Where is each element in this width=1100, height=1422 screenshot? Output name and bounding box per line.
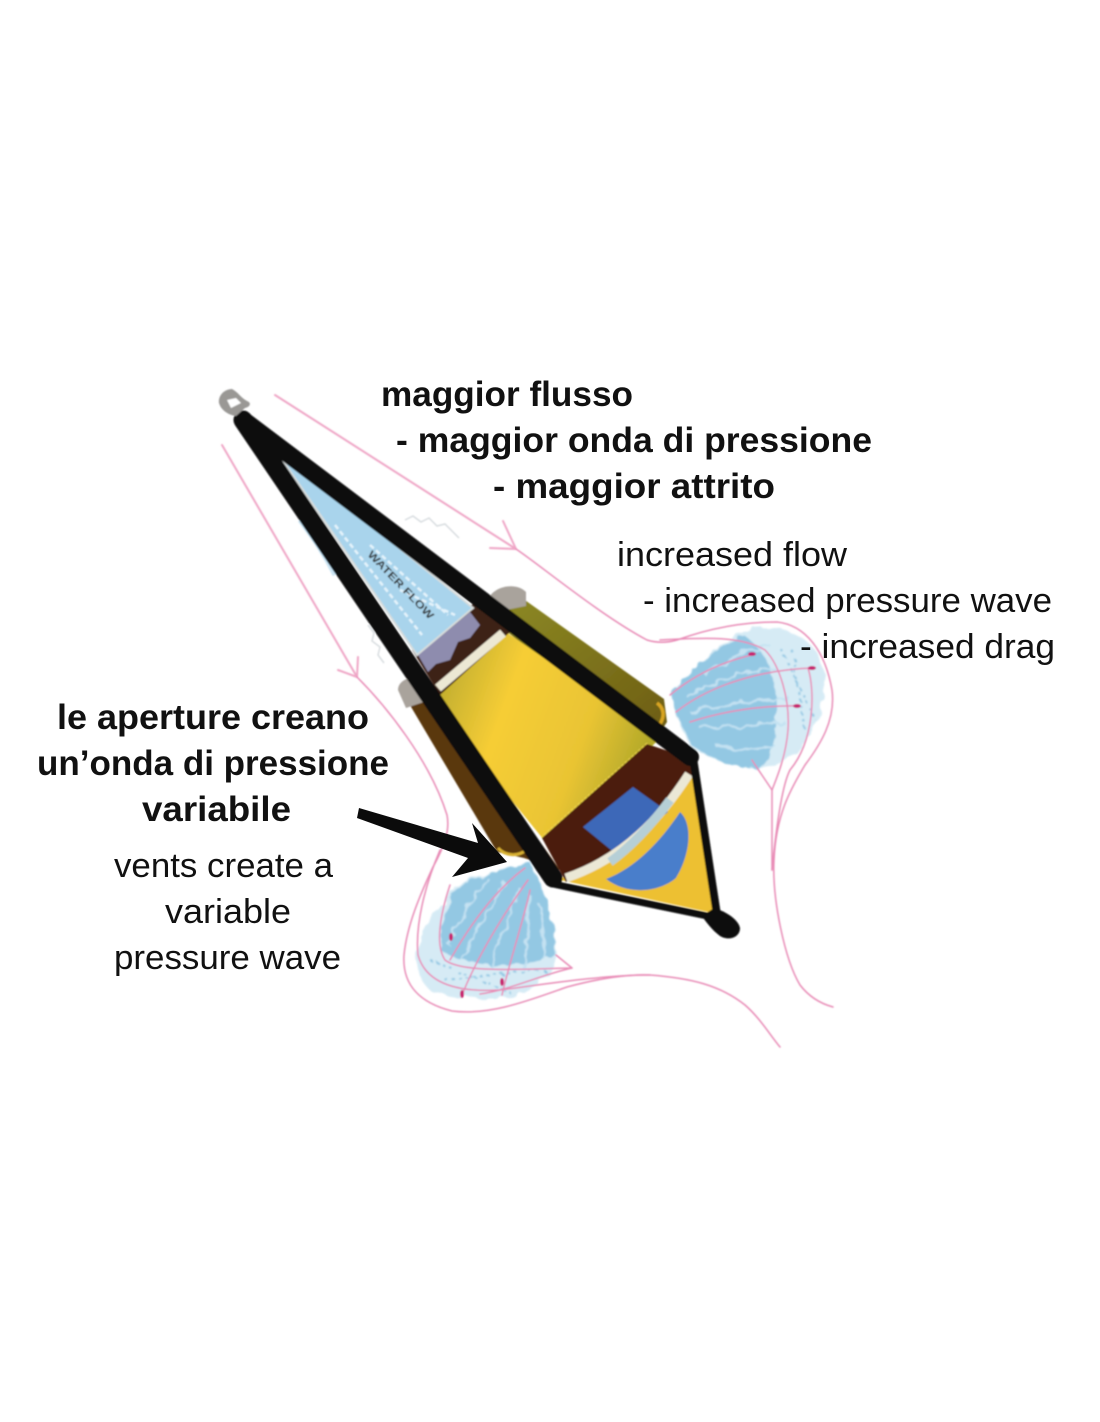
english text: increased flow: increased flow: [617, 536, 847, 574]
canopy lower brown side: [404, 680, 560, 870]
water flow funnel: [272, 445, 473, 655]
italian text: increased flow: [381, 375, 872, 506]
english text: increased flow: - increased pressure wave: [643, 582, 1052, 620]
magenta flow arrow dots: [449, 652, 816, 998]
rear brown band: [542, 744, 695, 882]
blue opening in nose: [606, 812, 689, 890]
purple-grey blotch: [418, 612, 480, 672]
front white band: [438, 633, 503, 688]
italian text: vents: [37, 698, 389, 829]
upper grommet: [488, 586, 526, 612]
nose cone: [560, 772, 718, 914]
english text: increased flow: [617, 536, 1055, 666]
front brown band: [412, 604, 510, 695]
black harness straps: [243, 420, 717, 918]
italian text: increased flow: maggior flusso: [381, 375, 633, 414]
italian text: vents: un’onda di pressione: [37, 744, 389, 783]
label: water flow: WATER FLOW: [365, 549, 436, 622]
italian text: increased flow: - maggior onda di pressione: [396, 421, 872, 460]
canopy yellow centre: [428, 630, 660, 850]
lower grommet: [398, 678, 430, 708]
right water plume: [672, 627, 824, 768]
nose white band: [566, 774, 689, 878]
english text: vents: [114, 847, 341, 977]
illustration: sea anchor drogue: [219, 389, 833, 1047]
english text: vents: vents create a: [114, 847, 333, 885]
italian text: vents: le aperture creano: [57, 698, 369, 737]
shackle: [219, 389, 250, 416]
english text: vents: pressure wave: [114, 939, 341, 977]
italian text: vents: variabile: [142, 790, 291, 829]
faint ruffles behind funnel: [368, 516, 459, 663]
english text: vents: variable: [165, 893, 291, 931]
canopy upper olive side: [495, 598, 667, 748]
arrow: vents callout: [357, 808, 507, 877]
english text: increased flow: - increased drag: [800, 628, 1055, 666]
pink flow lines: [222, 395, 833, 1047]
left water plume: [417, 862, 557, 999]
tail tip: [702, 908, 740, 938]
rear blue vent: [583, 787, 668, 854]
italian text: increased flow: - maggior attrito: [493, 467, 775, 506]
